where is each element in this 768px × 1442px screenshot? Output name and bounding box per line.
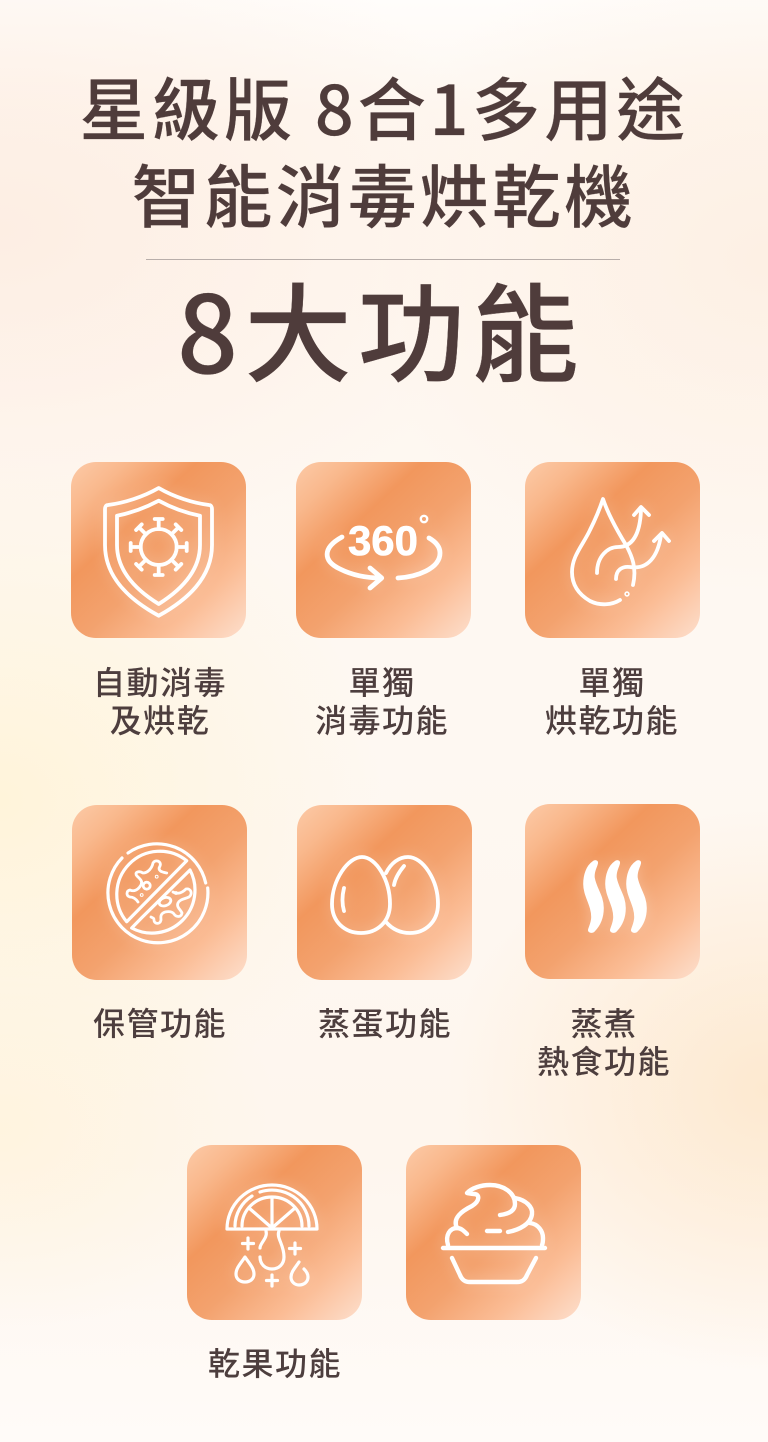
icon: 360 rotation: 360 [348,517,418,564]
label [93,658,227,742]
label [315,658,449,742]
icon: shield with virus [105,488,212,616]
label: 蒸煮 [570,999,638,1045]
title [79,56,689,242]
icon: drop with steam arrows [572,499,669,604]
icon: 360 rotation [327,516,440,588]
label: 及烘乾 [110,696,210,742]
label: 保管功能 [93,999,227,1045]
panel: standalone disinfect [296,462,471,742]
panel: storage [72,805,247,1045]
label: 蒸蛋功能 [318,999,452,1045]
icon: yogurt bowl [443,1185,545,1282]
icon: two eggs [332,857,438,933]
title: 智能消毒烘乾機 [132,143,636,242]
label: 單獨 [348,658,416,704]
label: 自動消毒 [93,658,227,704]
label: 單獨 [578,658,646,704]
panel: automatic disinfect and dry [71,462,246,742]
label [545,658,679,742]
label: 乾果功能 [208,1339,342,1385]
label: 消毒功能 [315,696,449,742]
label: 熱食功能 [537,1037,671,1083]
panel: yogurt [406,1145,581,1320]
subtitle: 8大功能 [177,249,585,404]
panel: steam cooked food [525,804,700,1083]
title: 星級版 8合1多用途 [79,56,689,155]
panel: egg steaming [297,805,472,1045]
icon: steam [584,861,646,932]
label [537,999,671,1083]
label: 烘乾功能 [545,696,679,742]
panel: dried fruit [187,1145,362,1385]
panel: standalone dry [525,462,700,742]
icon: virus prohibited [108,844,208,943]
icon: citrus slice and drops [227,1185,317,1286]
